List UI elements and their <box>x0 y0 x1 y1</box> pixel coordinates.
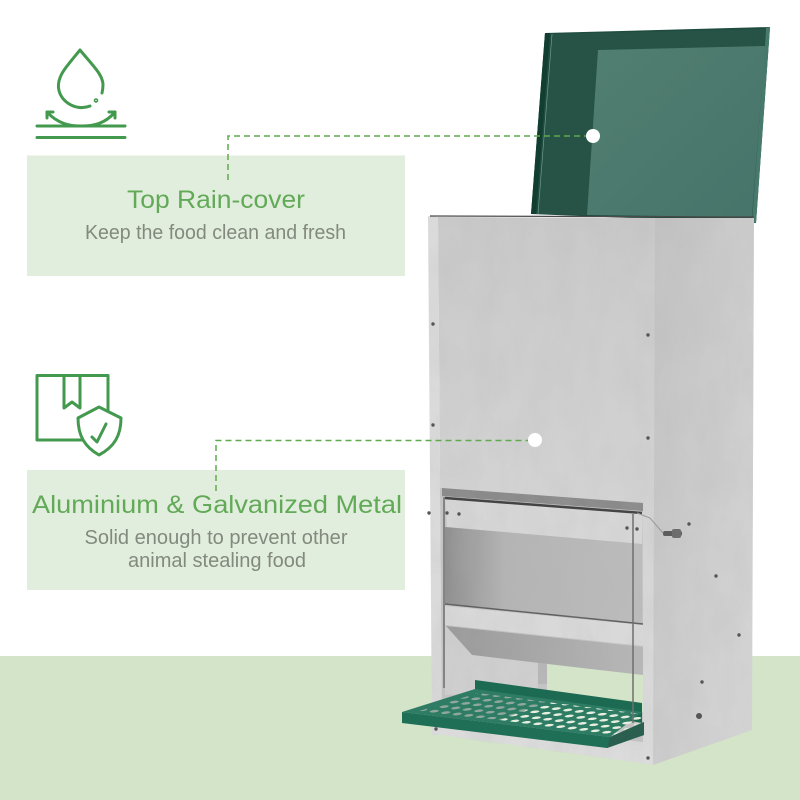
treadle platform <box>402 680 644 750</box>
drop bar and rods <box>444 497 663 723</box>
panel: top rain-cover <box>27 156 405 276</box>
text: solid enough: Solid enough to prevent other <box>84 527 348 549</box>
body: right side panel <box>653 218 754 765</box>
bottom green band <box>0 656 800 800</box>
hook pin <box>663 529 682 538</box>
text: keep the food clean: Keep the food clean and fresh <box>85 222 346 244</box>
galvanized texture <box>425 215 760 770</box>
panel: aluminium and galvanized metal <box>27 470 405 590</box>
top edge shadow <box>430 216 754 217</box>
callout: metal leader <box>216 433 542 491</box>
body: left flange <box>428 216 442 735</box>
icon: water drop on repellent surface <box>37 50 125 138</box>
feeder opening <box>440 488 643 742</box>
view through feeder <box>547 664 643 712</box>
icon: box with shield <box>37 376 121 455</box>
product: poultry feeder <box>402 27 770 770</box>
text: solid enough <box>84 527 348 572</box>
heading: aluminium and galvanized metal: Aluminium & Galvanized Metal <box>32 491 402 519</box>
rivets <box>427 322 741 760</box>
body: front panel <box>438 217 655 765</box>
lid: green rain cover <box>531 27 770 223</box>
text: solid enough: animal stealing food <box>128 550 306 572</box>
callout: rain cover leader <box>228 129 600 180</box>
heading: top rain-cover: Top Rain-cover <box>127 186 305 214</box>
